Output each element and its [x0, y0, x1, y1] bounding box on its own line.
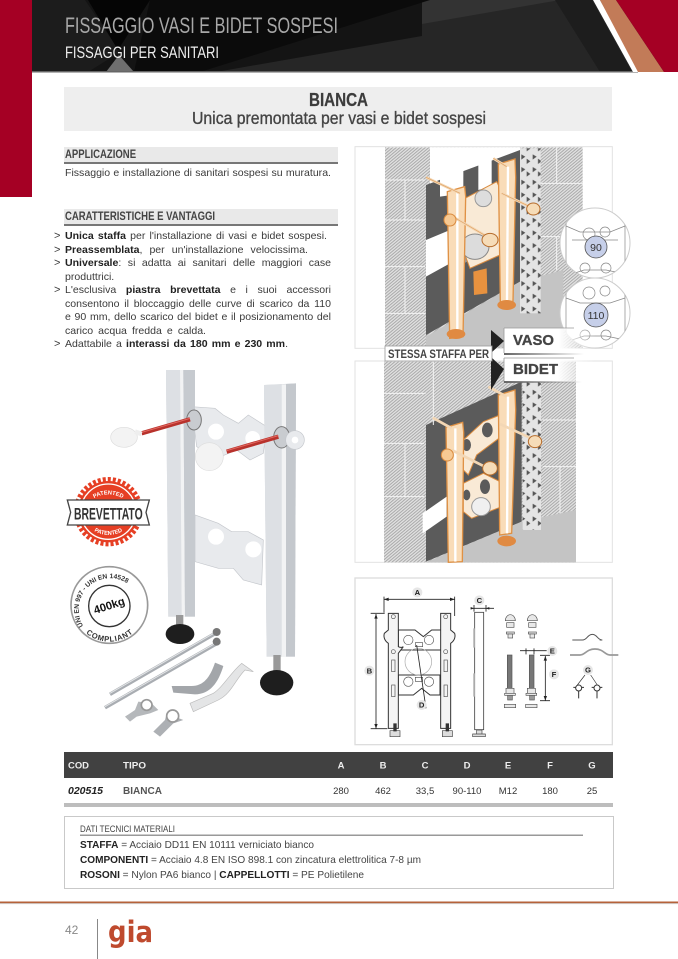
product title box: BIANCA	[309, 90, 368, 110]
features list: L'esclusiva piastra brevettata e i suoi accessori	[65, 284, 331, 296]
features list: e 90 mm, dello scarico del bidet e il posizionamento del	[65, 311, 331, 323]
dimension letters: B	[367, 666, 373, 675]
screws and caps	[504, 615, 537, 708]
saddle brackets	[172, 663, 223, 694]
callout: bidet label	[504, 358, 594, 383]
applicazione heading	[64, 147, 338, 164]
table header: TIPO	[123, 760, 146, 772]
features list: Preassemblata, per un'installazione velocissima.	[65, 244, 308, 256]
inset: 90 mm drain position	[560, 208, 630, 278]
footer divider	[97, 919, 98, 959]
inset: 110 mm drain position: 110	[588, 310, 605, 322]
side view	[475, 612, 484, 730]
table header: D	[464, 760, 471, 772]
callout: vaso label: VASO	[513, 333, 554, 349]
table header: A	[338, 760, 345, 772]
inset: 90 mm drain position: 90	[590, 242, 602, 254]
clamps	[125, 702, 158, 722]
table row: 020515	[68, 785, 103, 797]
feet	[176, 615, 183, 627]
right bar	[498, 159, 516, 303]
features list: produttrici.	[65, 270, 114, 282]
table row: M12	[499, 786, 517, 797]
callout: vaso label	[504, 328, 596, 355]
badge: brevettato: PATENTED	[94, 528, 122, 535]
table row: 280	[333, 786, 349, 797]
rods	[426, 158, 533, 238]
features list: Adattabile a interassi da 180 mm e 230 mm.	[65, 338, 288, 350]
left red sidebar	[0, 0, 32, 197]
header corner stripes	[593, 0, 678, 72]
table header	[64, 752, 613, 778]
logo: gia: gia	[108, 915, 153, 949]
dimension letters	[364, 587, 593, 710]
lower plate	[195, 515, 263, 585]
panel: dati tecnici materiali	[64, 816, 614, 888]
materials list: STAFFA = Acciaio DD11 EN 10111 verniciato bianco	[80, 839, 314, 851]
footer rule	[0, 902, 678, 904]
product photo: bracket and accessories	[105, 370, 304, 737]
dimension letters: C	[477, 596, 483, 605]
badge: uni en compliant 400kg: 400kg	[92, 596, 127, 617]
badge: brevettato: PATENTED	[92, 490, 124, 498]
header banner	[32, 0, 678, 72]
materials heading: DATI TECNICI MATERIALI	[80, 824, 175, 835]
bolt collars	[187, 410, 201, 430]
table row: 25	[587, 786, 597, 797]
table row	[68, 785, 597, 797]
white caps	[111, 427, 137, 447]
materials list: ROSONI = Nylon PA6 bianco | CAPPELLOTTI = PE Polietilene	[80, 869, 364, 881]
table row: 180	[542, 786, 558, 797]
table	[64, 752, 613, 807]
features list: Unica staffa per l'installazione di vasi e bidet sospesi.	[65, 230, 327, 242]
dimension letters: D	[419, 701, 425, 710]
badge: brevettato	[66, 477, 150, 546]
left post	[166, 370, 195, 617]
callout: bidet label: BIDET	[513, 362, 558, 378]
dimension letters: F	[552, 670, 557, 679]
badge: uni en compliant 400kg: UNI EN 997 - UNI EN 14528	[74, 574, 129, 628]
table row: 33,5	[416, 786, 434, 797]
table header: F	[547, 760, 553, 772]
text: >	[54, 338, 60, 350]
saddles and clamps	[570, 634, 618, 685]
table header: E	[505, 760, 511, 772]
upper plate	[192, 407, 267, 460]
dimension letters: E	[550, 647, 555, 656]
dimension letters: G	[585, 666, 591, 675]
table header: COD	[68, 760, 89, 772]
caratteristiche heading	[64, 209, 338, 226]
table row: 462	[375, 786, 391, 797]
panel: vaso installation illustration	[355, 147, 612, 348]
table header: G	[588, 760, 596, 772]
badge: uni en compliant 400kg	[70, 566, 148, 644]
subtitle: FISSAGGI PER SANITARI	[65, 43, 219, 62]
product title box	[64, 87, 612, 131]
callout: stessa staffa per	[385, 346, 492, 361]
applicazione text: Fissaggio e installazione di sanitari sospesi su muratura.	[65, 167, 331, 179]
lower plate	[463, 473, 503, 518]
applicazione heading: APPLICAZIONE	[65, 149, 136, 161]
arrows: vaso and bidet pointers	[491, 330, 504, 390]
features list: carico acqua fredda e calda.	[65, 324, 206, 336]
table row: BIANCA	[123, 785, 162, 797]
page number: 42	[65, 923, 79, 937]
threaded rods	[105, 632, 220, 708]
features list: Universale: si adatta ai sanitari delle maggiori case	[65, 257, 331, 269]
right post	[264, 383, 296, 657]
text: >	[54, 284, 60, 296]
panel: bidet installation illustration	[355, 361, 612, 562]
features list	[54, 230, 331, 350]
materials list	[80, 839, 421, 881]
feet	[447, 329, 465, 339]
table header: C	[422, 760, 429, 772]
table row: 90-110	[453, 786, 481, 797]
badge: brevettato: BREVETTATO	[74, 504, 143, 523]
plate	[465, 182, 502, 268]
callout: stessa staffa per: STESSA STAFFA PER	[388, 349, 490, 361]
badge: uni en compliant 400kg: COMPLIANT	[87, 628, 132, 642]
left bar	[447, 187, 466, 338]
dimension letters: A	[415, 588, 421, 597]
features list: consentono il bloccaggio delle curve di scarico da 110	[65, 298, 331, 310]
inset: 110 mm drain position	[560, 278, 630, 350]
caratteristiche heading: CARATTERISTICHE E VANTAGGI	[65, 211, 215, 223]
front view	[384, 613, 455, 728]
bars	[446, 422, 464, 562]
materials list: COMPONENTI = Acciaio 4.8 EN ISO 898.1 con zincatura elettrolitica 7-8 µm	[80, 854, 421, 866]
section: caratteristiche e vantaggi	[54, 209, 338, 350]
table header: B	[380, 760, 387, 772]
text: >	[54, 244, 60, 256]
section: applicazione	[64, 147, 338, 179]
product title box: Unica premontata per vasi e bidet sospesi	[192, 108, 486, 128]
panel: technical drawing	[355, 578, 618, 745]
text: >	[54, 257, 60, 269]
dimension lines	[371, 597, 550, 729]
red rods	[142, 419, 278, 452]
main title: FISSAGGIO VASI E BIDET SOSPESI	[65, 13, 338, 38]
text: >	[54, 230, 60, 242]
upper plate	[462, 415, 503, 475]
